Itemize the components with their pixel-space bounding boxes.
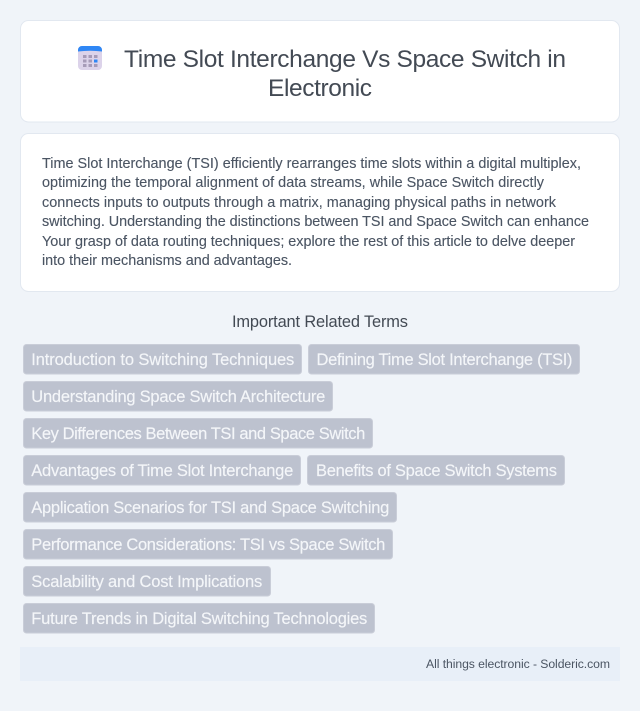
text block: description: switching. Understanding the distinctions between TSI and Space Switch can enhance bbox=[42, 214, 589, 230]
term tag bbox=[24, 382, 332, 411]
term tag bbox=[24, 344, 302, 374]
text block: description: Your grasp of data routing techniques; explore the rest of this article to delve deeper bbox=[42, 234, 575, 250]
term tag bbox=[24, 604, 374, 633]
footer: All things electronic - Solderic.com bbox=[426, 657, 610, 671]
term tag: Key Differences Between TSI and Space Switch bbox=[31, 425, 365, 443]
term tag: Introduction to Switching Techniques bbox=[31, 351, 294, 369]
panel: description bbox=[20, 134, 620, 292]
icon: calendar bbox=[78, 46, 102, 70]
heading: important related terms: Important Related Terms bbox=[232, 313, 408, 331]
term tag bbox=[24, 456, 300, 485]
term tag: Scalability and Cost Implications bbox=[31, 573, 262, 591]
text block: description bbox=[42, 156, 589, 269]
term tag: Understanding Space Switch Architecture bbox=[31, 388, 325, 406]
term tag: Performance Considerations: TSI vs Space Switch bbox=[31, 536, 385, 554]
footer bbox=[20, 647, 620, 681]
panel: related terms bbox=[24, 344, 580, 633]
term tag bbox=[308, 456, 564, 485]
term tag: Defining Time Slot Interchange (TSI) bbox=[316, 351, 572, 369]
term tag bbox=[24, 566, 270, 596]
panel: title header bbox=[20, 20, 620, 122]
term tag bbox=[308, 344, 580, 374]
term tag: Benefits of Space Switch Systems bbox=[316, 462, 557, 480]
text block: description: Time Slot Interchange (TSI) efficiently rearranges time slots within a digital multiplex, bbox=[42, 156, 581, 172]
term tag: Advantages of Time Slot Interchange bbox=[31, 462, 293, 480]
term tag bbox=[24, 492, 396, 522]
term tag bbox=[24, 530, 392, 559]
term tag: Application Scenarios for TSI and Space Switching bbox=[31, 499, 389, 517]
title: Time Slot Interchange Vs Space Switch in bbox=[124, 46, 566, 73]
term tag bbox=[24, 418, 372, 448]
text block: description: into their mechanisms and advantages. bbox=[42, 253, 292, 269]
text block: description: optimizing the temporal alignment of data streams, while Space Switch directly bbox=[42, 175, 545, 191]
title bbox=[124, 46, 566, 102]
term tag: Future Trends in Digital Switching Technologies bbox=[31, 610, 367, 628]
text block: description: connects inputs to outputs through a matrix, managing physical paths in network bbox=[42, 195, 557, 211]
title: Electronic bbox=[268, 75, 372, 102]
